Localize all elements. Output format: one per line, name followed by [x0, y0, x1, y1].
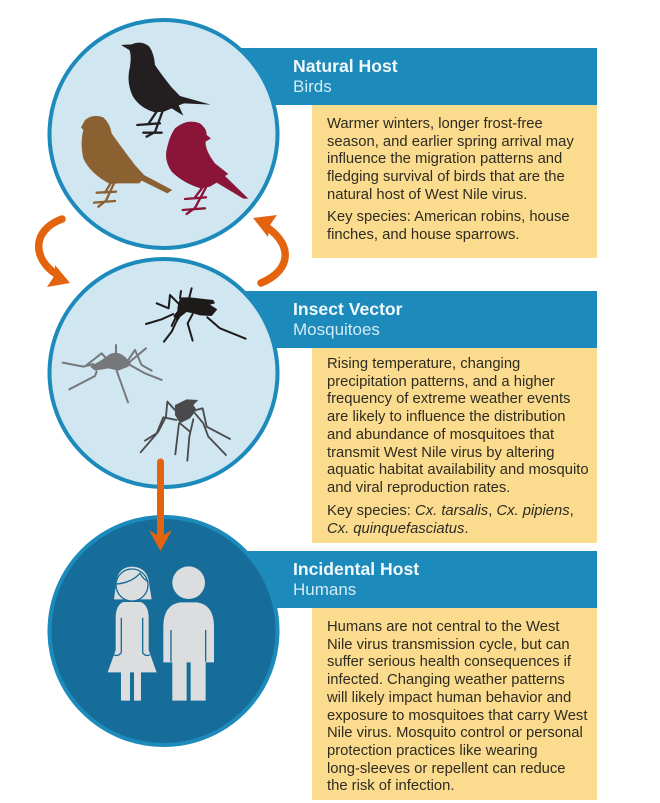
icon: black bird [121, 43, 211, 137]
text panel: incidental host: Humans are not central to the West [327, 619, 559, 635]
icon: red bird [166, 122, 248, 214]
header bar: incidental host: Humans [293, 580, 356, 599]
arrow: mosquitoes to birds [253, 215, 285, 283]
text panel: incidental host: exposure to mosquitoes that carry West [327, 708, 587, 724]
text panel: insect vector [312, 348, 597, 543]
icon: black mosquito [146, 288, 246, 342]
header bar: natural host: Natural Host [293, 56, 398, 76]
arrow: birds to mosquitoes [39, 219, 70, 287]
icon: grey mosquito [63, 345, 162, 402]
header bar: insect vector [240, 291, 597, 348]
arrow: mosquitoes to humans [149, 462, 172, 551]
text panel: natural host: Warmer winters, longer frost-free [327, 116, 543, 132]
text panel: natural host: season, and earlier spring arrival may [327, 134, 574, 150]
text panel: insect vector: frequency of extreme weather events [327, 391, 570, 407]
text panel: incidental host: will likely impact human behavior and [327, 690, 571, 706]
text panel: insect vector: Key species: Cx. tarsalis, Cx. pipiens, [327, 503, 574, 519]
text panel: incidental host: the risk of infection. [327, 778, 454, 794]
text panel: natural host: natural host of West Nile virus. [327, 187, 527, 203]
text panel: insect vector: precipitation patterns, and a higher [327, 374, 555, 390]
text panel: incidental host [312, 608, 597, 800]
circle: humans [50, 517, 278, 745]
header bar: natural host [240, 48, 597, 105]
text panel: incidental host: infected. Changing weather patterns [327, 672, 565, 688]
icon: boy [163, 566, 214, 701]
text panel: natural host [312, 105, 597, 258]
header bar: incidental host [240, 551, 597, 608]
text panel: natural host: finches, and house sparrows. [327, 227, 519, 243]
text panel: incidental host: protection practices like wearing [327, 743, 538, 759]
text panel: insect vector: aquatic habitat availability and mosquito [327, 462, 589, 478]
header bar: insect vector: Insect Vector [293, 299, 403, 319]
header bar: incidental host: Incidental Host [293, 559, 419, 579]
text panel: incidental host: suffer serious health consequences if [327, 654, 571, 670]
header bar: natural host: Birds [293, 77, 332, 96]
icon: girl [108, 567, 157, 701]
circle: birds [50, 20, 278, 248]
text panel: incidental host: Nile virus transmission cycle, but can [327, 637, 570, 653]
circle: mosquitoes [50, 259, 278, 487]
icon: dark grey mosquito [141, 399, 230, 461]
text panel: insect vector: transmit West Nile virus by altering [327, 445, 555, 461]
text panel: incidental host: Nile virus. Mosquito control or personal [327, 725, 583, 741]
text panel: natural host: fledging survival of birds that are the [327, 169, 565, 185]
header bar: insect vector: Mosquitoes [293, 320, 380, 339]
icon: brown bird [81, 116, 172, 207]
text panel: insect vector: and abundance of mosquitoes that [327, 427, 554, 443]
text panel: natural host: influence the migration patterns and [327, 151, 562, 167]
text panel: insect vector: and viral reproduction rates. [327, 480, 510, 496]
text panel: insect vector: Cx. quinquefasciatus. [327, 521, 468, 537]
text panel: natural host: Key species: American robins, house [327, 209, 570, 225]
text panel: insect vector: are likely to influence the distribution [327, 409, 566, 425]
text panel: incidental host: long-sleeves or repellent can reduce [327, 761, 566, 777]
text panel: insect vector: Rising temperature, changing [327, 356, 520, 372]
